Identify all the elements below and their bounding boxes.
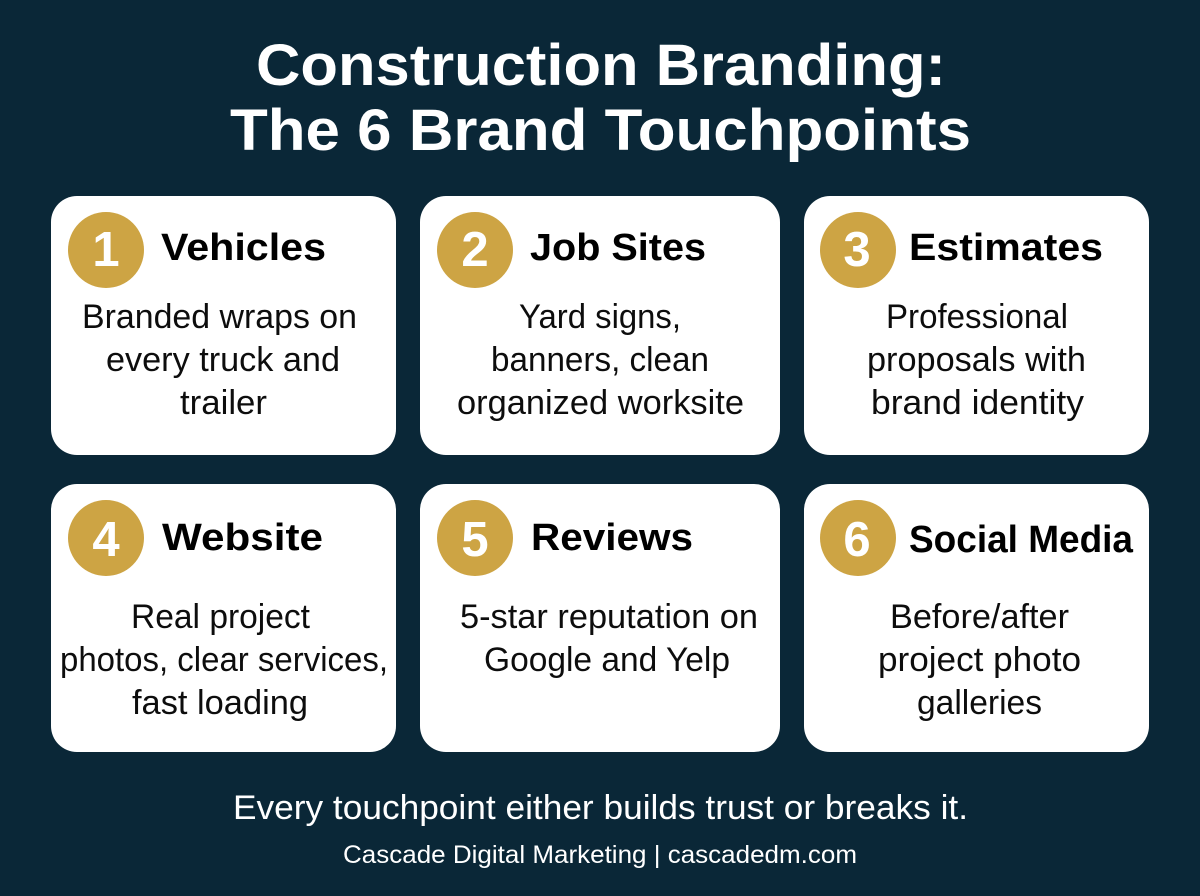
icon: number 6: 6 <box>843 513 871 567</box>
text: job sites description <box>457 298 744 422</box>
title: The 6 Brand Touchpoints <box>230 98 971 163</box>
panel: reviews <box>420 484 780 752</box>
icon: number 4 <box>68 500 144 576</box>
text: website description: Real project <box>131 598 311 636</box>
text: website description: photos, clear services, <box>60 641 388 679</box>
text: vehicles description: trailer <box>180 384 267 422</box>
text: reviews description: Google and Yelp <box>484 641 730 679</box>
text: estimates description: Professional <box>886 298 1068 336</box>
heading: job sites: Job Sites <box>530 227 706 269</box>
panel: social media <box>804 484 1149 752</box>
title: Construction Branding: <box>256 33 946 98</box>
text: job sites description: organized worksite <box>457 384 744 422</box>
text: social media description: project photo <box>878 641 1081 679</box>
tagline: Every touchpoint either builds trust or breaks it. <box>233 789 968 827</box>
text: vehicles description <box>82 298 357 422</box>
panel: website <box>51 484 396 752</box>
panel: estimates <box>804 196 1149 455</box>
icon: number 6 <box>820 500 896 576</box>
text: social media description: galleries <box>917 684 1042 722</box>
heading: website: Website <box>162 517 323 559</box>
text: vehicles description: Branded wraps on <box>82 298 357 336</box>
heading: social media: Social Media <box>909 519 1134 561</box>
icon: number 4: 4 <box>92 513 120 567</box>
icon: number 3: 3 <box>843 223 871 277</box>
text: estimates description: proposals with <box>867 341 1086 379</box>
heading: vehicles: Vehicles <box>161 227 326 269</box>
text: reviews description: 5-star reputation on <box>460 598 758 636</box>
icon: number 3 <box>820 212 896 288</box>
icon: number 5 <box>437 500 513 576</box>
panel: vehicles <box>51 196 396 455</box>
text: job sites description: banners, clean <box>491 341 709 379</box>
heading: reviews: Reviews <box>531 517 693 559</box>
text: estimates description: brand identity <box>871 384 1084 422</box>
icon: number 5: 5 <box>461 513 489 567</box>
text: vehicles description: every truck and <box>106 341 340 379</box>
text: estimates description <box>867 298 1086 422</box>
text: social media description: Before/after <box>890 598 1069 636</box>
icon: number 2 <box>437 212 513 288</box>
footer credit: Cascade Digital Marketing | cascadedm.com <box>343 841 857 869</box>
text: job sites description: Yard signs, <box>519 298 681 336</box>
icon: number 1 <box>68 212 144 288</box>
title <box>230 33 971 163</box>
icon: number 2: 2 <box>461 223 489 277</box>
icon: number 1: 1 <box>92 223 120 277</box>
text: reviews description <box>460 598 758 679</box>
text: social media description <box>878 598 1081 722</box>
text: website description: fast loading <box>132 684 308 722</box>
heading: estimates: Estimates <box>909 227 1103 269</box>
panel: job sites <box>420 196 780 455</box>
text: website description <box>60 598 388 722</box>
